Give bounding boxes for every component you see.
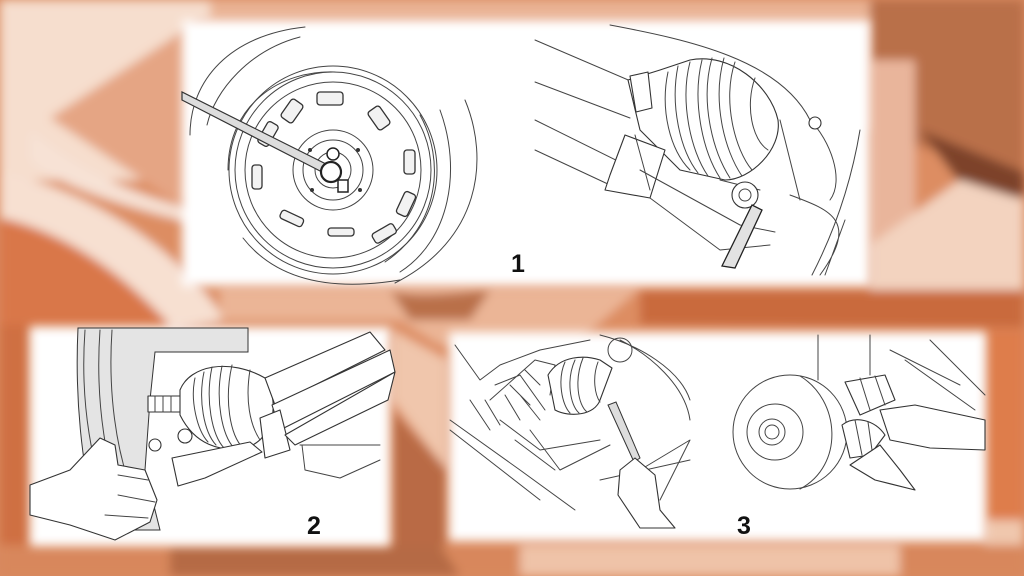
icon: hand gripping hub <box>30 438 157 540</box>
step number 1: 1 <box>511 250 525 278</box>
illustration: drive shaft boot with wrench <box>535 25 860 275</box>
icon: hands on joint <box>880 405 985 450</box>
step number 2: 2 <box>307 512 321 540</box>
illustration: hub carrier and drive shaft with hand <box>30 328 395 540</box>
icon: hand holding lever <box>618 458 675 528</box>
illustration: wheel with bar on hub nut <box>182 27 477 284</box>
panel 2: removing the outer joint <box>30 327 395 546</box>
illustration: gearbox with boot and lever <box>450 335 690 528</box>
illustration: brake disc with hands fitting joint <box>733 335 985 490</box>
step number 3: 3 <box>737 512 751 540</box>
panel 1: wheel hub and drive shaft boot drawings <box>182 20 870 286</box>
panel 3: gearbox side and brake disc joint <box>449 332 986 541</box>
